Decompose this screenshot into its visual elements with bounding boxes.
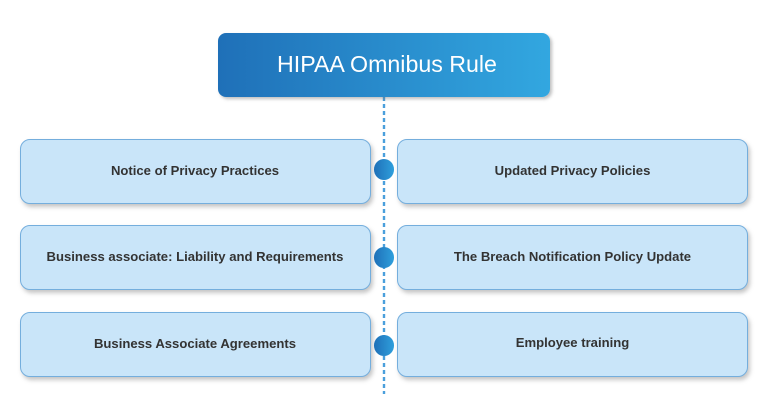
node: row 3 <box>374 335 394 356</box>
connector: dashed vertical line <box>382 97 386 394</box>
panel: Breach Notification Policy Update <box>397 225 748 290</box>
panel: Notice of Privacy Practices: Notice of Privacy Practices <box>111 162 279 178</box>
panel: Business associate liability: Business associate: Liability and Requirements <box>47 248 343 264</box>
title <box>218 33 550 97</box>
panel: Breach Notification Policy Update: The Breach Notification Policy Update <box>454 248 691 264</box>
panel: Business Associate Agreements <box>20 312 370 377</box>
panel: Updated Privacy Policies: Updated Privacy Policies <box>495 162 650 178</box>
panel: Business Associate Agreements: Business Associate Agreements <box>94 336 296 350</box>
title: HIPAA Omnibus Rule <box>277 50 497 76</box>
panel: Notice of Privacy Practices <box>20 139 370 204</box>
panel: Employee training <box>397 312 748 377</box>
node: row 2 <box>374 247 394 268</box>
panel: Updated Privacy Policies <box>397 139 748 204</box>
panel: Employee training: Employee training <box>516 334 629 350</box>
panel: Business associate liability <box>20 225 370 290</box>
node: row 1 <box>374 159 394 180</box>
